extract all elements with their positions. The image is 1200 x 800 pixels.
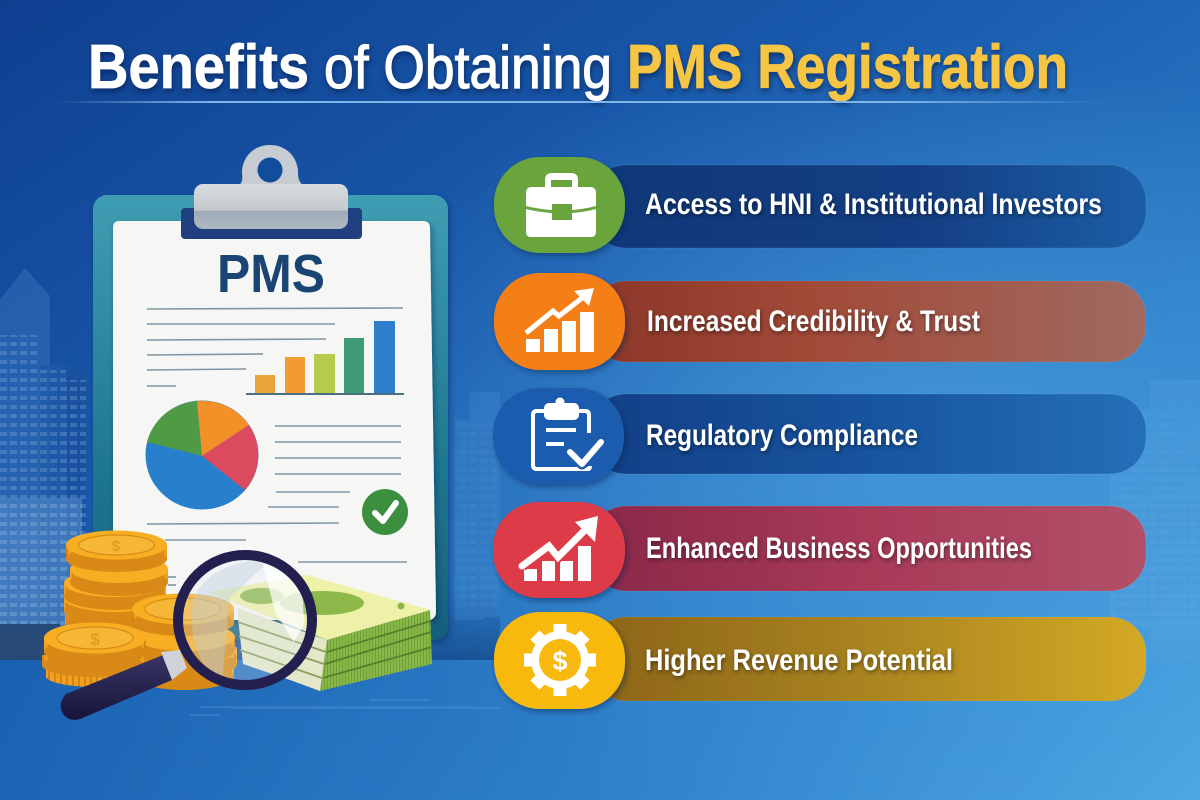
title: PMS Registration [627, 33, 1068, 102]
benefit row 3 [493, 388, 1146, 484]
icon tile [493, 502, 625, 598]
icon: rising chart [526, 288, 594, 352]
benefit row 5 [494, 612, 1146, 709]
paper sheet [113, 221, 436, 620]
icon tile [494, 157, 625, 253]
magnifying glass [61, 554, 313, 720]
banknotes [208, 575, 432, 691]
coin stack front [42, 622, 146, 687]
bar chart [246, 321, 404, 395]
icon tile [494, 273, 625, 370]
lens [177, 554, 313, 686]
pie chart [146, 400, 258, 510]
icon: growth arrow [522, 516, 598, 581]
bar [590, 165, 1146, 248]
coin stack back [64, 530, 168, 637]
skyline left [0, 268, 86, 660]
label: Increased Credibility & Trust [647, 305, 980, 338]
icon tile [493, 388, 624, 484]
benefit row 1 [494, 157, 1146, 253]
bar [590, 281, 1146, 362]
clipboard board [93, 195, 448, 640]
gold coins [42, 530, 237, 690]
skyline right [455, 380, 1200, 640]
label: Enhanced Business Opportunities [646, 532, 1032, 565]
label: Higher Revenue Potential [645, 644, 953, 677]
benefit row 2 [494, 273, 1146, 370]
benefit row 4 [493, 502, 1146, 598]
handle [61, 650, 187, 720]
label: Regulatory Compliance [646, 419, 918, 452]
PMS heading: PMS [217, 244, 325, 304]
document text lines [147, 308, 407, 585]
check badge [362, 489, 408, 535]
icon tile [494, 612, 625, 709]
icon: checklist clipboard [533, 398, 601, 469]
coin stack back: $ [112, 538, 121, 555]
coin stack middle [132, 594, 237, 690]
icon: dollar gear: $ [552, 646, 568, 676]
title: Benefits [88, 33, 309, 102]
title [88, 33, 1068, 102]
clipboard illustration [93, 145, 448, 640]
label: Access to HNI & Institutional Investors [645, 188, 1102, 221]
icon: briefcase [526, 173, 596, 237]
icon: dollar gear [524, 624, 596, 696]
bar [590, 506, 1146, 591]
bar [590, 394, 1146, 474]
title: of Obtaining [324, 34, 612, 101]
ring [178, 555, 312, 685]
bar [590, 617, 1146, 701]
coin stack front: $ [90, 630, 100, 649]
clip [181, 145, 362, 239]
